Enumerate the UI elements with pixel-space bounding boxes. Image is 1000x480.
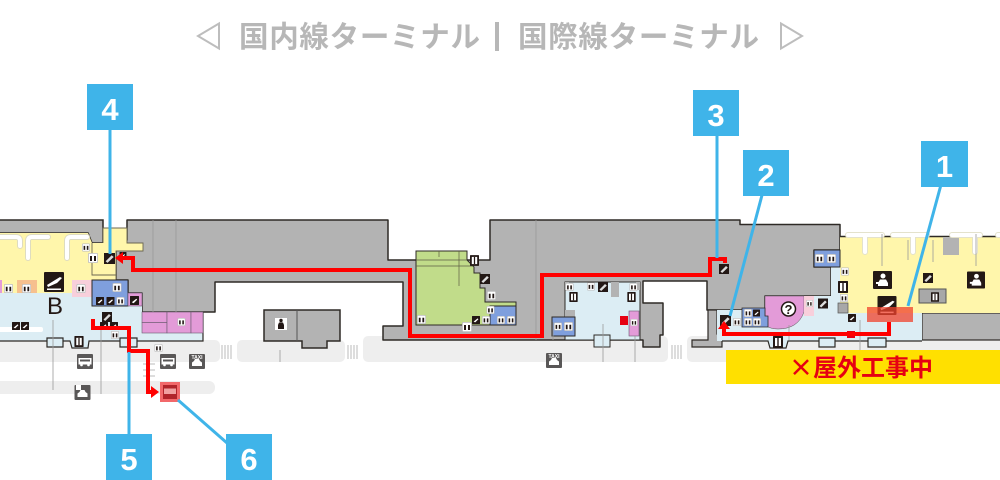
roads	[0, 336, 1000, 394]
icon: escalator near 4	[104, 253, 115, 264]
letter B: B	[47, 293, 63, 320]
icon: bus 1	[77, 354, 93, 369]
title: terminal navigation	[198, 21, 802, 54]
divider bar	[495, 22, 499, 51]
heading: domestic terminal: 国内線ターミナル	[239, 21, 480, 54]
panel: blue rooms centre	[490, 306, 516, 325]
ducts: right	[848, 235, 1000, 252]
left wall with gates	[0, 312, 203, 348]
icon: check-in person 2	[967, 271, 985, 289]
icon: small left set	[4, 244, 185, 352]
heading: international terminal: 国際線ターミナル	[518, 21, 759, 54]
panel: right gray block	[922, 313, 1000, 340]
icon: taxi centre: TAXI	[548, 354, 560, 360]
panel: right light blue area	[717, 267, 922, 341]
route: 1 to 2	[718, 321, 889, 334]
panel: green area	[416, 251, 516, 325]
white walkway strip	[0, 327, 43, 332]
central pink room	[629, 311, 639, 336]
road band: right	[687, 336, 1000, 362]
icon: taxi: TAXI	[191, 355, 203, 361]
arrow: international terminal	[781, 24, 802, 48]
route: 5 to 6	[93, 319, 159, 398]
panel: left gray wing	[0, 220, 103, 243]
callout: outdoor construction notice: ×屋外工事中	[789, 348, 933, 383]
leader line: 5	[128, 352, 130, 440]
badge 2	[743, 150, 789, 196]
icon: information	[782, 302, 796, 317]
right wall with gates	[722, 338, 922, 348]
road band: left	[0, 340, 220, 362]
panel: main gray building	[116, 220, 840, 347]
panel: left yellow area	[0, 228, 143, 293]
icon: escalator near 3	[719, 264, 729, 274]
icon: taxi	[189, 354, 205, 369]
badge 4	[87, 84, 133, 130]
icon: escalator near 2	[720, 315, 731, 326]
leader line: 3	[716, 120, 718, 258]
badge 6: 6	[240, 442, 258, 477]
blue room: top right	[814, 250, 840, 267]
small building divider	[296, 310, 298, 341]
badge 5: 5	[120, 442, 138, 477]
badge 3	[693, 90, 739, 136]
top wall line	[840, 236, 1000, 238]
icon: parking car	[74, 385, 90, 400]
central blue room	[552, 317, 575, 336]
icon: escalator near 5	[102, 312, 112, 322]
ducts: left	[0, 237, 87, 258]
badge 2: 2	[757, 158, 775, 193]
icons: right area	[719, 254, 985, 348]
panel: right yellow area	[840, 236, 1000, 313]
badge 5	[106, 434, 152, 480]
lower road band	[0, 381, 215, 394]
route: 3 to 4	[115, 252, 725, 336]
panel: left rooms	[0, 280, 142, 306]
panel: left light blue area	[0, 293, 203, 341]
badge 6	[226, 434, 272, 480]
panel: left pink shops	[142, 312, 203, 333]
icon: bus stop highlighted	[160, 382, 180, 402]
badge 3: 3	[707, 98, 725, 133]
grey guide lines	[53, 220, 976, 394]
green area grid lines	[416, 251, 474, 286]
icon: information: ?	[785, 302, 793, 317]
road band: middle	[363, 336, 668, 362]
pale pink room	[804, 296, 814, 316]
icons: centre area	[275, 255, 637, 368]
leader line: 4	[108, 120, 112, 254]
badge 4: 4	[101, 92, 119, 127]
icon: green area set	[417, 255, 515, 332]
gray block in right yellow area	[943, 237, 959, 255]
crossing stripes	[143, 345, 681, 376]
icon: central set	[546, 282, 637, 368]
leader line: 6	[178, 400, 235, 450]
construction area highlight	[867, 307, 913, 322]
pink information area	[765, 296, 804, 329]
badge 1	[921, 141, 968, 187]
icon: departures B	[44, 272, 64, 292]
icon: check-in person 1	[873, 271, 892, 289]
gray block near gate	[692, 310, 722, 347]
icon: person building	[275, 318, 287, 330]
icon: departures right	[878, 296, 896, 315]
right gray inner blocks	[838, 303, 848, 313]
arrow: domestic terminal	[198, 24, 219, 48]
central gray partitions	[565, 282, 640, 317]
icons: left area	[4, 244, 205, 402]
callout: outdoor construction notice	[726, 348, 1000, 384]
icon: bus 2	[160, 354, 176, 369]
icon: red sign	[620, 316, 628, 325]
leader line: 1	[908, 170, 945, 306]
gate bump	[594, 335, 610, 347]
road band: centre	[237, 340, 345, 362]
panel: central light blue area	[565, 282, 640, 347]
yellow area outlines	[92, 228, 143, 280]
panel: small gray building	[264, 310, 340, 348]
gray counter in right yellow area	[919, 289, 946, 303]
leader line: 2	[730, 180, 766, 316]
blue room: right	[742, 308, 768, 327]
icon: small right set	[733, 254, 939, 348]
badge 1: 1	[936, 149, 953, 184]
